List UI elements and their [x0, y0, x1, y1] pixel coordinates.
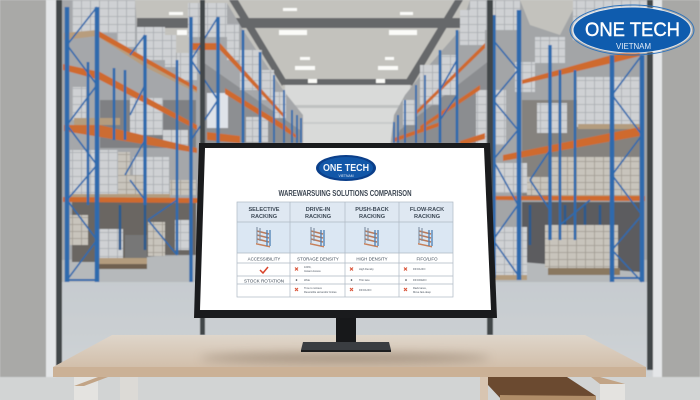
column headings [248, 207, 444, 220]
dark window frames [56, 0, 653, 370]
monitor bezel [194, 143, 497, 318]
table cell notes: Rack lanes, [413, 286, 427, 290]
desk [53, 335, 646, 400]
right rack backdrop [390, 0, 650, 260]
column headings: PUSH-BACK [355, 207, 389, 213]
left rack backdrop [62, 0, 303, 260]
row labels: FIFO/LIFO [417, 256, 438, 262]
table cell notes: 100%, [304, 265, 312, 269]
monitor [194, 143, 497, 352]
column headings: DRIVE-IN [306, 207, 330, 213]
rack icons [256, 227, 432, 248]
row labels [244, 256, 438, 284]
row labels: ACCESSIBILITY [248, 256, 280, 262]
screen title: WAREWARSUING SOLUTIONS COMPARISON [278, 189, 412, 198]
desk drawer box [488, 377, 596, 400]
bullets [296, 279, 407, 281]
table cell notes: Thin lane [359, 278, 370, 282]
column headings: FLOW-RACK [410, 207, 444, 213]
floor [62, 282, 652, 380]
column headings: RACKING [414, 214, 440, 220]
column headings: RACKING [305, 214, 331, 220]
table cell notes: FIFO/LIFO [413, 267, 425, 271]
table cell notes: Move fast-deep [413, 290, 431, 294]
table cell notes: Reversible aid and/or limites [304, 290, 337, 294]
dark lower bays [100, 100, 196, 148]
cross marks [295, 268, 407, 291]
screen logo [316, 155, 376, 181]
orange shelf beams [63, 30, 645, 203]
table cell notes: Wide [304, 278, 310, 282]
row labels: STORAGE DENSITY [297, 256, 339, 262]
row labels: STOCK ROTATION [244, 278, 284, 284]
ceiling lights [169, 8, 417, 83]
right wall [653, 0, 700, 377]
table cell notes [304, 265, 431, 294]
check mark [260, 267, 268, 273]
blue rack uprights and bracing [67, 7, 642, 282]
foreground floor [0, 377, 700, 400]
monitor stand [301, 316, 391, 352]
desk front edge [53, 367, 646, 377]
ceiling beams [137, 0, 465, 86]
pallet bases [70, 118, 640, 280]
ceiling [62, 0, 652, 90]
corner logo: One Tech Vietnam: VIETNAM [616, 42, 651, 51]
screen logo: ONE TECH [323, 163, 369, 174]
column headings: RACKING [359, 214, 385, 220]
table cell notes: FIFO/FEFO [413, 278, 427, 282]
corner logo: One Tech Vietnam [570, 5, 694, 55]
table cell notes: Instant Access [304, 269, 321, 273]
pallets of boxes, left [70, 0, 286, 260]
column headings: RACKING [251, 214, 277, 220]
row labels: HIGH DENSITY [356, 256, 388, 262]
monitor screen [200, 148, 491, 310]
far wall [285, 85, 410, 145]
left wall [0, 0, 56, 377]
table cell notes: High Density [359, 267, 374, 271]
corner logo: One Tech Vietnam: ONE TECH [585, 20, 680, 41]
desk shadow [200, 353, 490, 363]
desk legs [74, 377, 625, 400]
desk top [53, 335, 646, 367]
comparison table [237, 202, 453, 297]
screen logo: VIETNAM [338, 174, 354, 178]
column headings: SELECTIVE [248, 207, 280, 213]
table cell notes: Time to retrieve [304, 286, 322, 290]
table cell notes: FIFO/LIFO [359, 288, 371, 292]
pallets of boxes, right [403, 0, 650, 275]
